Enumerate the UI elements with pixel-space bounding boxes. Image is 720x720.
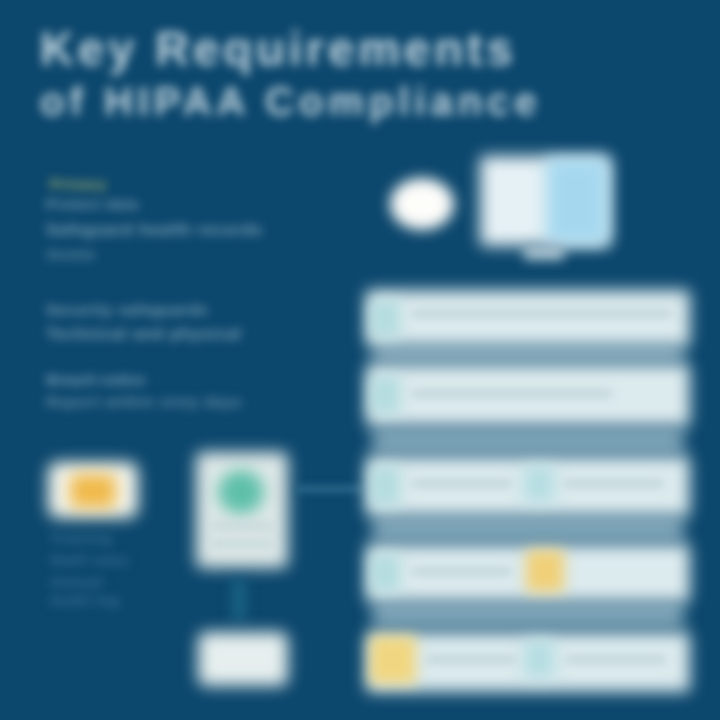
text block: first requirement: Access <box>46 246 95 262</box>
title: of HIPAA Compliance <box>40 80 542 124</box>
row 1 <box>353 277 703 357</box>
text block: third requirement <box>42 370 244 412</box>
arrow: document to box <box>232 580 246 620</box>
icon: card with yellow badge <box>34 448 152 532</box>
row 5 <box>353 620 703 705</box>
icon: monitor <box>467 142 624 269</box>
title <box>34 22 542 130</box>
text block: second requirement <box>42 300 245 346</box>
icon: speech bubble <box>390 178 454 230</box>
text block: under card: Annual <box>50 574 103 590</box>
text block: second requirement: Technical and physical <box>46 326 242 343</box>
text block: third requirement: Report within sixty days <box>46 394 243 411</box>
text block: under card <box>50 530 129 608</box>
text block: first requirement: Protect data <box>46 196 139 212</box>
icon: small box <box>198 632 288 686</box>
text block: third requirement: Breach notice <box>46 372 145 389</box>
row 4 <box>353 532 703 614</box>
text block: second requirement: Security safeguards <box>46 302 208 319</box>
arrow: document to rows <box>296 486 362 492</box>
title: Key Requirements <box>40 22 517 75</box>
text block: under card: Training <box>50 530 112 546</box>
text block: first requirement <box>42 174 265 263</box>
row 3 <box>353 444 703 528</box>
text block: under card: Audit log <box>50 592 120 608</box>
text block: first requirement: Privacy <box>50 176 107 192</box>
icon: document with green seal <box>183 439 301 581</box>
text block: first requirement: Safeguard health records <box>46 222 263 239</box>
row 2 <box>353 353 703 438</box>
text block: under card: Staff rules <box>50 552 129 568</box>
panel: rows list <box>353 277 703 705</box>
